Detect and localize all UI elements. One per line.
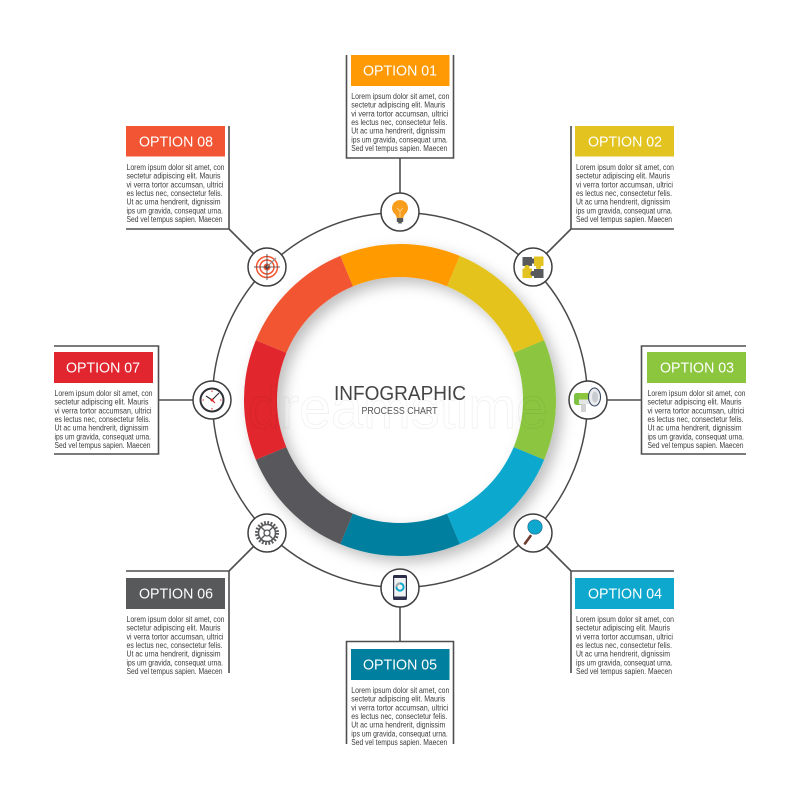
body text 04: es lectus nec, consectetur felis.	[576, 641, 672, 650]
body text 05: vi verra tortor accumsan, ultrici	[351, 703, 448, 712]
body text 08: vi verra tortor accumsan, ultrici	[126, 180, 224, 189]
heading text 02: OPTION 02	[588, 133, 662, 150]
heading bar 03	[647, 352, 746, 383]
body text 04: vi verra tortor accumsan, ultrici	[576, 632, 673, 641]
body text 07: Ut ac urna hendrerit, dignissim	[54, 424, 149, 433]
heading text 05: OPTION 05	[363, 656, 437, 673]
body text 05: Lorem ipsum dolor sit amet, con	[351, 686, 449, 695]
segment 03 green	[529, 347, 540, 453]
heading bar 05	[351, 649, 450, 680]
body text 07: ips um gravida, consequat urna.	[54, 432, 151, 441]
heading bar 02	[575, 126, 674, 156]
panel: option 04	[571, 571, 674, 676]
body text 02: es lectus nec, consectetur felis.	[576, 189, 672, 198]
icon: light bulb	[381, 193, 419, 231]
panel: option 08	[126, 126, 229, 229]
segment 02 yellow	[453, 271, 529, 347]
body text 04: sectetur adipiscing elit. Mauris	[576, 624, 670, 633]
body text 03: es lectus nec, consectetur felis.	[648, 415, 744, 424]
body text 03: vi verra tortor accumsan, ultrici	[648, 406, 745, 415]
icon: smartphone	[381, 569, 419, 607]
panel: option 01	[346, 55, 454, 158]
icon: gear	[248, 514, 286, 552]
donut ring	[260, 260, 540, 540]
segment 07 red	[260, 347, 271, 453]
body text 08: Ut ac urna hendrerit, dignissim	[126, 198, 221, 207]
body text 01: Lorem ipsum dolor sit amet, con	[351, 92, 449, 101]
body text 05: sectetur adipiscing elit. Mauris	[351, 695, 445, 704]
heading bar 08	[126, 126, 225, 156]
body text 04	[576, 615, 674, 676]
body text 06: Sed vel tempus sapien. Maecen	[126, 667, 222, 676]
body text 02	[576, 163, 674, 224]
body text 03: Sed vel tempus sapien. Maecen	[648, 441, 744, 450]
body text 03	[648, 389, 746, 450]
segment 06 gray	[271, 453, 347, 529]
body text 02: sectetur adipiscing elit. Mauris	[576, 172, 670, 181]
body text 02: ips um gravida, consequat urna.	[576, 206, 672, 215]
connectors	[159, 158, 642, 641]
panel: option 07	[54, 346, 158, 454]
body text 08: Sed vel tempus sapien. Maecen	[126, 215, 222, 224]
body text 05: ips um gravida, consequat urna.	[351, 729, 448, 738]
segment 08 orange-red	[271, 271, 347, 347]
body text 04: ips um gravida, consequat urna.	[576, 658, 672, 667]
body text 07: Sed vel tempus sapien. Maecen	[54, 441, 150, 450]
center subtitle: PROCESS CHART	[362, 406, 438, 417]
body text 08: Lorem ipsum dolor sit amet, con	[126, 163, 224, 172]
body text 08: es lectus nec, consectetur felis.	[126, 189, 222, 198]
panel: option 03	[642, 346, 746, 454]
body text 02: Lorem ipsum dolor sit amet, con	[576, 163, 674, 172]
body text 01: sectetur adipiscing elit. Mauris	[351, 101, 445, 110]
segment 01 orange	[347, 260, 453, 271]
icon: megaphone	[569, 381, 607, 419]
body text 05: es lectus nec, consectetur felis.	[351, 712, 447, 721]
outer connector ring	[212, 212, 588, 588]
heading text 06: OPTION 06	[139, 585, 213, 602]
body text 08: ips um gravida, consequat urna.	[126, 206, 223, 215]
body text 07: Lorem ipsum dolor sit amet, con	[54, 389, 152, 398]
body text 05: Sed vel tempus sapien. Maecen	[351, 738, 447, 747]
icon: clock	[193, 381, 231, 419]
heading text 03: OPTION 03	[660, 359, 734, 376]
body text 04: Sed vel tempus sapien. Maecen	[576, 667, 672, 676]
body text 04: Ut ac urna hendrerit, dignissim	[576, 650, 670, 659]
panel: option 05	[346, 642, 454, 747]
body text 06: ips um gravida, consequat urna.	[126, 658, 223, 667]
heading bar 04	[575, 578, 674, 609]
heading bar 06	[126, 578, 225, 609]
segment 04 blue	[453, 453, 529, 529]
body text 07: vi verra tortor accumsan, ultrici	[54, 406, 152, 415]
body text 01: Ut ac urna hendrerit, dignissim	[351, 127, 446, 136]
heading text 08: OPTION 08	[139, 133, 213, 150]
body text 06: es lectus nec, consectetur felis.	[126, 641, 222, 650]
center title: INFOGRAPHIC	[334, 382, 466, 405]
body text 06: Ut ac urna hendrerit, dignissim	[126, 650, 221, 659]
body text 07	[54, 389, 152, 450]
body text 06: sectetur adipiscing elit. Mauris	[126, 624, 220, 633]
body text 06: vi verra tortor accumsan, ultrici	[126, 632, 224, 641]
body text 08	[126, 163, 224, 224]
heading text 07: OPTION 07	[66, 359, 140, 376]
icon: magnifier	[514, 514, 552, 552]
body text 02: Ut ac urna hendrerit, dignissim	[576, 198, 670, 207]
panel: option 02	[571, 126, 674, 229]
segment 05 teal	[347, 529, 453, 540]
icon: puzzle	[514, 248, 552, 286]
body text 03: Lorem ipsum dolor sit amet, con	[648, 389, 746, 398]
body text 01	[351, 92, 449, 153]
heading text 01: OPTION 01	[363, 62, 437, 79]
icon: target	[248, 248, 286, 286]
body text 04: Lorem ipsum dolor sit amet, con	[576, 615, 674, 624]
body text 01: Sed vel tempus sapien. Maecen	[351, 144, 447, 153]
heading bar 01	[351, 55, 450, 86]
panel: option 06	[126, 571, 229, 676]
body text 01: es lectus nec, consectetur felis.	[351, 118, 447, 127]
body text 03: sectetur adipiscing elit. Mauris	[648, 398, 742, 407]
heading bar 07	[54, 352, 153, 383]
heading text 04: OPTION 04	[588, 585, 662, 602]
body text 02: Sed vel tempus sapien. Maecen	[576, 215, 672, 224]
body text 02: vi verra tortor accumsan, ultrici	[576, 180, 673, 189]
body text 07: es lectus nec, consectetur felis.	[54, 415, 150, 424]
body text 06	[126, 615, 224, 676]
body text 03: ips um gravida, consequat urna.	[648, 432, 744, 441]
body text 07: sectetur adipiscing elit. Mauris	[54, 398, 148, 407]
body text 03: Ut ac urna hendrerit, dignissim	[648, 424, 742, 433]
body text 05: Ut ac urna hendrerit, dignissim	[351, 721, 446, 730]
body text 05	[351, 686, 449, 747]
watermark: dreamstime	[248, 376, 548, 441]
body text 06: Lorem ipsum dolor sit amet, con	[126, 615, 224, 624]
body text 01: vi verra tortor accumsan, ultrici	[351, 109, 448, 118]
body text 08: sectetur adipiscing elit. Mauris	[126, 172, 220, 181]
body text 01: ips um gravida, consequat urna.	[351, 135, 448, 144]
